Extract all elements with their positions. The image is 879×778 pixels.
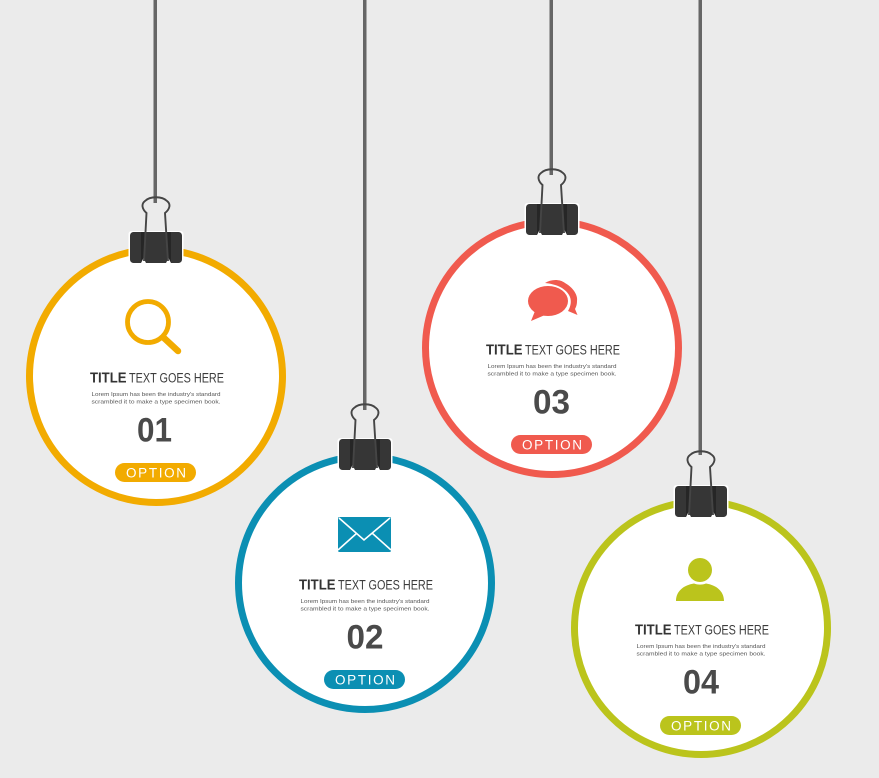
heading remainder: TEXT GOES HERE bbox=[129, 370, 224, 386]
hanging string bbox=[550, 0, 553, 175]
body text bbox=[488, 364, 617, 378]
body text bbox=[636, 644, 766, 658]
option button: OPTION bbox=[671, 718, 731, 734]
body text: Lorem Ipsum has been the industry's standard bbox=[488, 364, 616, 370]
heading remainder: TEXT GOES HERE bbox=[338, 578, 433, 592]
hanging string bbox=[698, 0, 702, 455]
body text bbox=[92, 392, 221, 406]
body text: Lorem Ipsum has been the industry's standard bbox=[92, 392, 220, 398]
option button bbox=[115, 463, 196, 482]
heading: TITLE bbox=[635, 622, 672, 638]
icon: person bbox=[676, 558, 724, 601]
binder clip bbox=[524, 169, 580, 236]
ring bbox=[30, 250, 282, 502]
binder clip bbox=[128, 197, 184, 264]
option button: OPTION bbox=[522, 438, 582, 452]
ring bbox=[238, 456, 492, 710]
icon: envelope bbox=[338, 517, 391, 552]
binder clip bbox=[338, 404, 392, 471]
body text: scrambled it to make a type specimen book. bbox=[92, 400, 221, 406]
hanging string bbox=[363, 0, 366, 410]
number: 01 bbox=[137, 412, 172, 450]
option button: OPTION bbox=[335, 672, 395, 688]
body text: Lorem Ipsum has been the industry's standard bbox=[300, 599, 430, 605]
icon: speech bubbles bbox=[528, 280, 578, 321]
number: 04 bbox=[683, 664, 719, 702]
option button bbox=[660, 716, 741, 735]
heading: TITLE bbox=[486, 342, 523, 358]
panel: card 02 bbox=[238, 0, 492, 710]
number: 03 bbox=[533, 384, 570, 422]
body text: scrambled it to make a type specimen book. bbox=[636, 652, 766, 658]
option button: OPTION bbox=[126, 466, 186, 480]
panel: card 04 bbox=[574, 0, 828, 754]
heading: TITLE bbox=[299, 578, 336, 594]
body text bbox=[300, 599, 430, 612]
panel: card 01 bbox=[30, 0, 282, 502]
body text: scrambled it to make a type specimen book. bbox=[488, 372, 617, 378]
option button bbox=[324, 670, 405, 689]
heading remainder: TEXT GOES HERE bbox=[525, 342, 620, 358]
heading: TITLE bbox=[90, 370, 127, 386]
number: 02 bbox=[346, 618, 384, 656]
binder clip bbox=[674, 451, 728, 518]
body text: scrambled it to make a type specimen book. bbox=[300, 606, 430, 612]
icon: magnifier bbox=[128, 302, 178, 351]
ring bbox=[574, 502, 828, 754]
option button bbox=[511, 435, 592, 454]
ring bbox=[426, 222, 678, 474]
heading remainder: TEXT GOES HERE bbox=[674, 622, 769, 638]
body text: Lorem Ipsum has been the industry's standard bbox=[636, 644, 766, 650]
panel: card 03 bbox=[426, 0, 678, 474]
hanging string bbox=[154, 0, 157, 203]
